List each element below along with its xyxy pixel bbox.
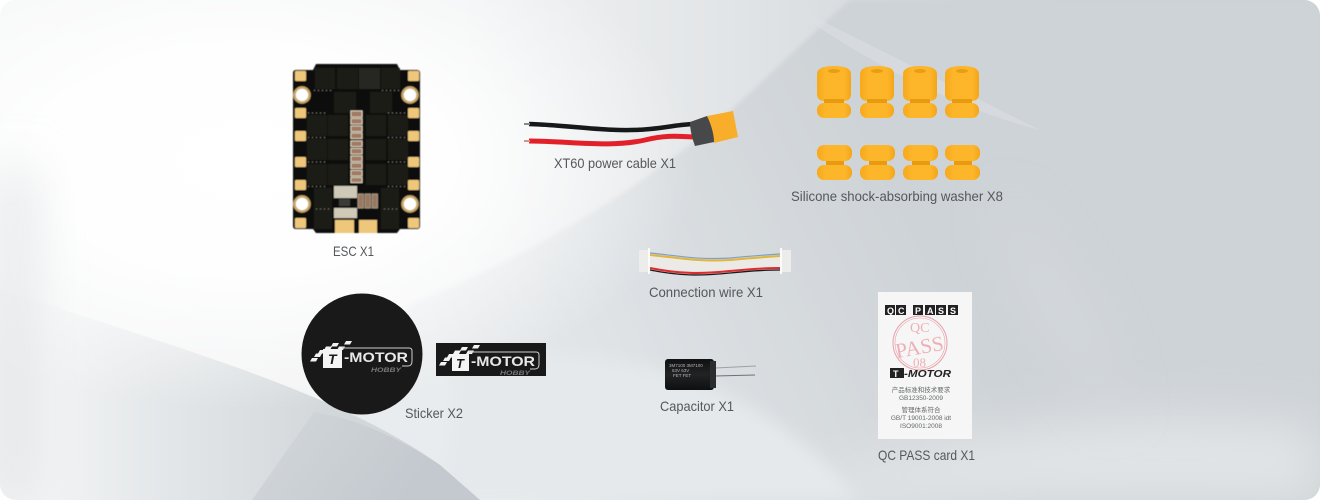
logo: T-MOTOR: T xyxy=(328,351,338,367)
QC PASS heading: C xyxy=(898,306,905,316)
label: ESC: ESC X1 xyxy=(333,243,374,259)
capacitor: FET FET xyxy=(673,373,691,378)
label: QC PASS card: QC PASS card X1 xyxy=(878,447,975,463)
XT60 power cable xyxy=(524,111,738,146)
QC PASS heading xyxy=(885,305,958,316)
certification text: ISO9001:2008 xyxy=(900,423,942,430)
QC PASS heading: Q xyxy=(887,306,894,316)
capacitor column xyxy=(351,111,362,182)
certification text xyxy=(891,385,951,430)
red stamp: PASS xyxy=(894,331,945,363)
gold pads xyxy=(295,71,419,233)
shunt components xyxy=(334,186,378,218)
QC PASS card xyxy=(878,292,972,439)
logo: T-MOTOR: -MOTOR xyxy=(344,349,408,365)
label: washers: Silicone shock-absorbing washer X8 xyxy=(791,188,1003,204)
connection wire xyxy=(639,248,791,275)
round sticker xyxy=(302,294,422,414)
logo: T-MOTOR xyxy=(439,345,539,377)
logo: T-MOTOR: -MOTOR xyxy=(471,353,535,369)
QC PASS heading: S xyxy=(938,306,944,316)
logo: T-MOTOR: T xyxy=(456,356,465,371)
silicone washers xyxy=(817,66,980,180)
certification text: GB12350-2009 xyxy=(899,395,943,402)
capacitor: 3M7100 3M7100 xyxy=(669,363,703,368)
QC PASS heading: A xyxy=(927,306,934,316)
capacitor xyxy=(665,359,756,390)
QC PASS heading: P xyxy=(915,306,921,316)
logo: T-MOTOR: HOBBY xyxy=(500,371,531,377)
label: XT60 power cable: XT60 power cable X1 xyxy=(554,155,676,171)
XT60 connector xyxy=(707,111,738,143)
card logo xyxy=(890,368,952,380)
solder dots xyxy=(308,90,406,209)
label: sticker: Sticker X2 xyxy=(405,405,463,421)
label: capacitor: Capacitor X1 xyxy=(660,398,734,414)
mounting holes xyxy=(294,88,418,212)
red stamp: QC xyxy=(910,321,929,336)
tall washers xyxy=(817,66,979,118)
red stamp xyxy=(893,316,947,370)
washer holes xyxy=(828,69,968,73)
label: connection wire: Connection wire X1 xyxy=(649,284,763,300)
certification text: 管理体系符合 xyxy=(902,405,941,414)
red stamp: 08 xyxy=(913,355,926,370)
certification text: GB/T 19001-2008 idt xyxy=(891,415,951,422)
rectangular sticker xyxy=(436,343,546,377)
capacitor: 63V 63V xyxy=(672,368,689,373)
short washers xyxy=(817,145,980,180)
MOSFET chips xyxy=(307,68,408,229)
certification text: 产品标准和技术要求 xyxy=(892,385,951,394)
logo: T-MOTOR: HOBBY xyxy=(371,367,402,374)
card logo: T xyxy=(893,369,899,379)
logo: T-MOTOR xyxy=(310,341,412,374)
ESC circuit board xyxy=(293,64,420,233)
card logo: -MOTOR xyxy=(904,369,952,380)
QC PASS heading: S xyxy=(950,306,956,316)
